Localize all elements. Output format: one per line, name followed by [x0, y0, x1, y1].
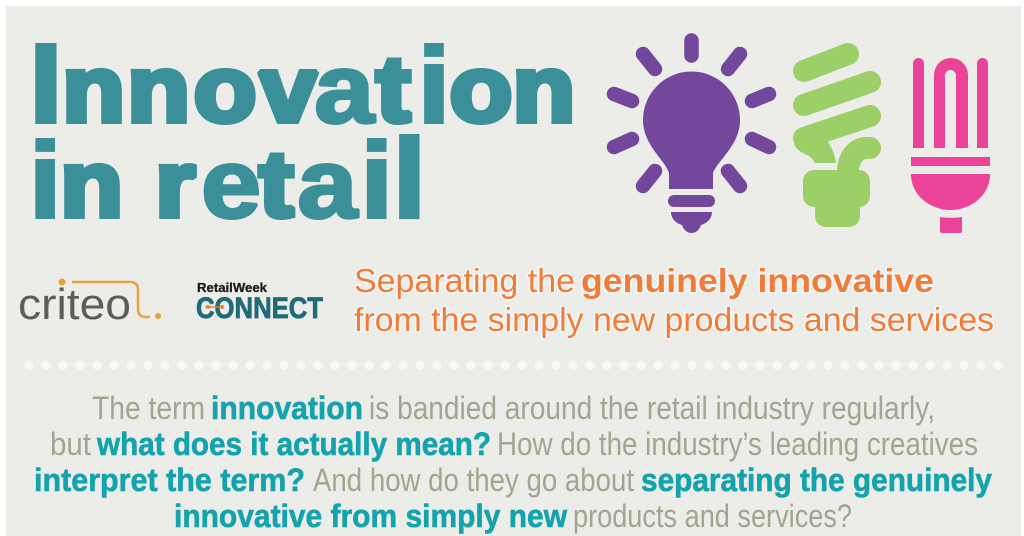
subtitle: genuinely innovative	[581, 262, 934, 299]
intro text block: innovation	[211, 390, 363, 426]
intro text block: what does it actually mean?	[96, 426, 491, 462]
title: I	[29, 21, 63, 147]
intro text block: And how do they go about	[313, 462, 634, 498]
intro text block: separating the genuinely	[641, 462, 992, 498]
title	[29, 21, 575, 242]
title: i	[417, 25, 450, 146]
logo: criteo: criteo	[18, 280, 131, 329]
icon: purple light bulb	[614, 40, 769, 233]
intro text block: but	[50, 426, 91, 462]
title: on	[450, 37, 575, 141]
intro text block: is bandied around the retail industry regularly,	[369, 390, 935, 426]
intro text block: interpret the term?	[34, 462, 305, 498]
subtitle: Separating the	[354, 262, 575, 299]
icon: pink fluorescent bulb	[911, 58, 990, 233]
logo: Retail Week Connect	[196, 280, 323, 325]
logo: Retail Week Connect: RetailWeek	[197, 280, 268, 295]
title: e	[201, 129, 261, 238]
icon: green spiral bulb	[794, 54, 870, 227]
title: i	[29, 120, 62, 241]
title: t	[259, 132, 293, 236]
title: l	[392, 116, 427, 242]
title: t	[376, 37, 410, 141]
intro text block: The term	[92, 390, 205, 426]
subtitle: from the simply new products and services	[354, 301, 994, 338]
title: n r	[60, 132, 195, 236]
logo: Retail Week Connect: CONNECT	[196, 292, 323, 325]
title: nnov	[62, 37, 317, 141]
intro text block: products and services?	[573, 498, 852, 534]
subtitle	[354, 262, 994, 338]
intro text block: innovative from simply new	[174, 498, 567, 534]
intro text block	[34, 390, 992, 534]
title: a	[314, 34, 375, 143]
title: i	[360, 120, 393, 241]
title: a	[297, 129, 358, 238]
